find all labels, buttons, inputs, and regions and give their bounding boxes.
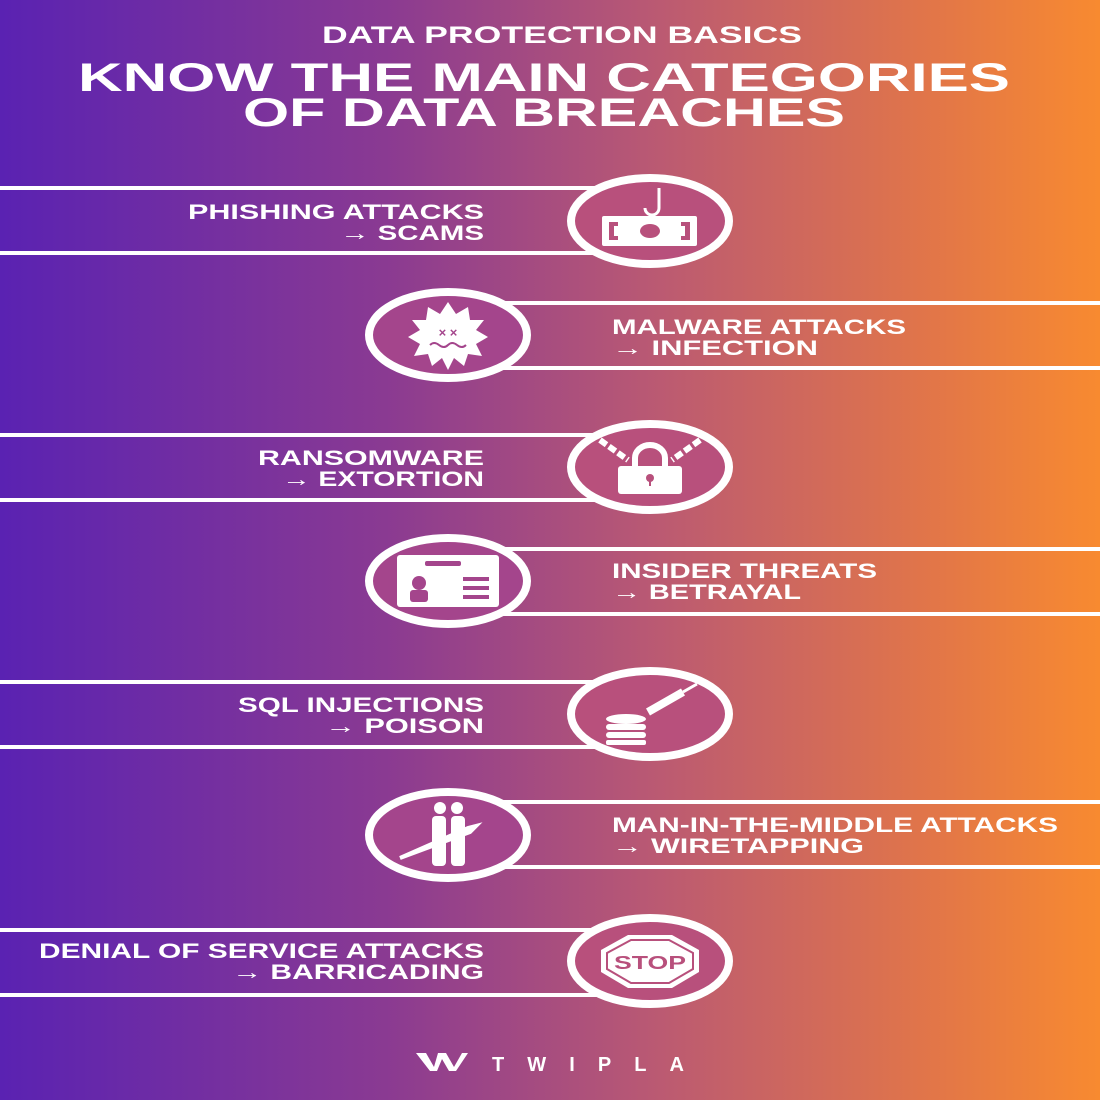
row 5: sql injections: SQL INJECTIONS [238,694,484,717]
icon: database and syringe [606,684,697,745]
icon: stop sign [601,935,699,988]
icon: padlock with chains [600,440,700,494]
row 1: phishing [0,178,729,264]
icon: stop sign: STOP [614,953,686,973]
icon: virus [408,302,488,370]
icon: ID card [397,555,499,607]
row 2: malware: MALWARE ATTACKS [612,316,906,339]
row 1: phishing: → SCAMS [340,222,484,245]
row 3: ransomware: RANSOMWARE [258,447,484,470]
row 3: ransomware: → EXTORTION [282,468,484,491]
row 4: insider threats: → BETRAYAL [612,581,801,604]
logo: twipla [416,1053,684,1076]
row 4: insider threats: INSIDER THREATS [612,560,877,583]
icon: virus: × × [439,325,458,340]
row 5: sql injections: → POISON [325,715,484,738]
row 7: denial of service: DENIAL OF SERVICE ATTACKS [39,940,484,963]
row 6: man in the middle: MAN-IN-THE-MIDDLE ATTACKS [612,814,1058,837]
title: KNOW THE MAIN CATEGORIES [78,56,1010,100]
logo: twipla: TWIPLA [492,1054,684,1076]
icon: hook and money [602,188,697,246]
subtitle: DATA PROTECTION BASICS [322,22,802,49]
row 7: denial of service [0,918,729,1004]
row 3: ransomware [0,424,729,510]
title [78,56,1010,135]
row 6: man in the middle: → WIRETAPPING [612,835,864,858]
row 6: man in the middle [369,792,1100,878]
title: OF DATA BREACHES [243,91,845,135]
icon: two figures with knife [400,802,476,866]
row 7: denial of service: → BARRICADING [232,961,484,984]
row 5: sql injections [0,671,729,757]
row 2: malware [369,292,1100,378]
row 1: phishing: PHISHING ATTACKS [188,201,484,224]
row 2: malware: → INFECTION [612,337,818,360]
row 4: insider threats [369,538,1100,624]
